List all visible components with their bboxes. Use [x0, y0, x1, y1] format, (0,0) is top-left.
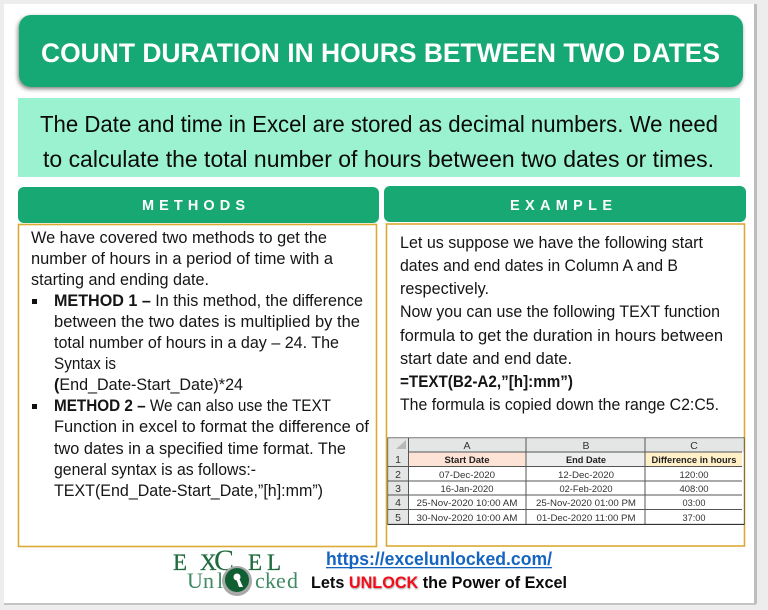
example text box: Let us suppose we have the following start [400, 234, 703, 252]
spreadsheet table: 3 [395, 483, 401, 495]
example text box: The formula is copied down the range C2:C5. [400, 396, 719, 414]
methods text box: starting and ending date. [31, 271, 209, 289]
spreadsheet table: 16-Jan-2020 [440, 484, 494, 495]
spreadsheet table: 5 [395, 512, 401, 524]
methods text box: METHOD 1 – In this method, the difference [54, 292, 363, 310]
spreadsheet table: End Date [566, 455, 606, 466]
intro text panel: The Date and time in Excel are stored as decimal numbers. We need [40, 111, 718, 137]
spreadsheet table: 01-Dec-2020 11:00 PM [536, 513, 636, 524]
tagline: Lets UNLOCK the Power of Excel [311, 574, 567, 592]
methods text box: general syntax is as follows:- [54, 461, 256, 479]
spreadsheet table: 1 [395, 454, 401, 466]
logo: excel unlocked [173, 544, 298, 596]
example heading [384, 186, 746, 222]
example text box: dates and end dates in Column A and B [400, 257, 678, 275]
example text box: respectively. [400, 280, 489, 298]
logo: excel unlocked: EXC EL [173, 544, 281, 577]
spreadsheet table [388, 438, 744, 525]
spreadsheet table: 408:00 [680, 484, 708, 495]
icon: padlock [222, 566, 252, 596]
methods text box: Syntax is [54, 355, 116, 373]
methods text box: We have covered two methods to get the [31, 229, 327, 247]
spreadsheet table: A [463, 440, 471, 452]
spreadsheet table: 37:00 [682, 513, 706, 524]
methods text box: between the two dates is multiplied by the [54, 313, 360, 331]
example text box: =TEXT(B2-A2,”[h]:mm”) [400, 373, 573, 391]
spreadsheet table: 25-Nov-2020 01:00 PM [536, 498, 636, 509]
title banner [19, 15, 743, 87]
methods text box [18, 224, 376, 546]
intro text panel [18, 98, 740, 177]
spreadsheet table: 4 [395, 497, 401, 509]
intro text panel: to calculate the total number of hours between two dates or times. [43, 146, 714, 172]
spreadsheet table: B [582, 440, 590, 452]
spreadsheet table: 07-Dec-2020 [439, 470, 495, 481]
example text box: formula to get the duration in hours between [400, 327, 723, 345]
panel: methods [18, 187, 379, 546]
methods text box: Function in excel to format the difference of [54, 418, 369, 436]
spreadsheet table: Start Date [444, 455, 490, 466]
spreadsheet table: 25-Nov-2020 10:00 AM [416, 498, 518, 509]
spreadsheet table: C [690, 440, 698, 452]
methods text box: total number of hours in a day – 24. The [54, 334, 339, 352]
logo: excel unlocked: Unlocked [187, 568, 298, 593]
spreadsheet table: 02-Feb-2020 [560, 484, 612, 495]
link: website url: https://excelunlocked.com/ [326, 548, 552, 569]
panel: example [384, 186, 746, 546]
methods heading: METHODS [142, 198, 245, 214]
methods text box: two dates in a specified time format. The [54, 440, 346, 458]
methods text box: (End_Date-Start_Date)*24 [54, 376, 243, 394]
methods text box: METHOD 2 – We can also use the TEXT [54, 397, 331, 415]
example text box: Now you can use the following TEXT function [400, 303, 720, 321]
example heading: EXAMPLE [510, 198, 612, 214]
methods text box: TEXT(End_Date-Start_Date,”[h]:mm”) [54, 482, 323, 500]
spreadsheet table: Difference in hours [652, 455, 736, 466]
spreadsheet table: 2 [395, 469, 401, 481]
spreadsheet table: 03:00 [682, 498, 706, 509]
title banner: COUNT DURATION IN HOURS BETWEEN TWO DATES [41, 38, 720, 68]
spreadsheet table: 30-Nov-2020 10:00 AM [416, 513, 518, 524]
example text box [386, 224, 744, 546]
spreadsheet table: 120:00 [680, 470, 708, 481]
example text box: start date and end date. [400, 350, 572, 368]
methods text box: number of hours in a period of time with a [31, 250, 334, 268]
methods heading [18, 187, 379, 223]
spreadsheet table: 12-Dec-2020 [558, 470, 614, 481]
